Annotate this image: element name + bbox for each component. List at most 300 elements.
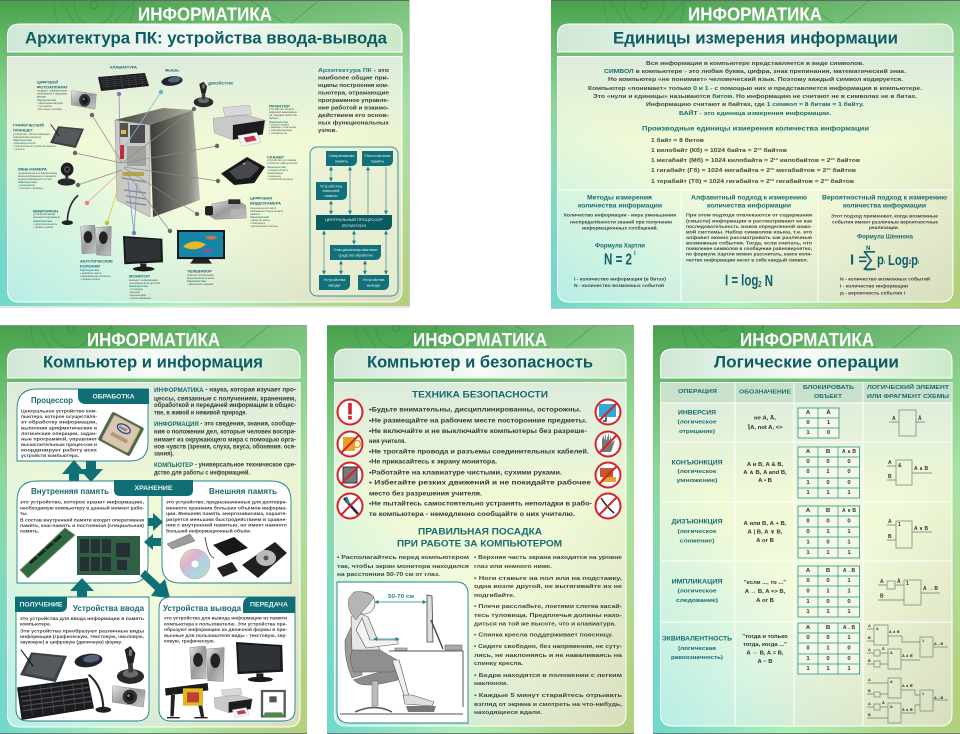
body text: В состав внутренней памяти входит оперативная [20, 516, 144, 522]
operation name: (логическое [678, 469, 716, 475]
label: camera: виде [37, 94, 46, 98]
logic gate: Ā [918, 415, 922, 422]
arrow: up to processor [62, 460, 86, 481]
label: TV: позволяет просматривать [187, 273, 214, 277]
safety rules: ния учителя. [369, 438, 406, 445]
image: joystick [117, 646, 144, 684]
arrow: input to memory [70, 578, 94, 598]
label: microphone: • чувствительность [33, 222, 57, 226]
column: alphabet approach: количества информации [707, 202, 791, 210]
label: tablet: • чувствительность рабочей поверхн. [13, 144, 56, 148]
truth table: Ā [826, 409, 831, 416]
column: measurement methods: Формула Хартли [595, 242, 645, 250]
label: tablet: • точность [13, 147, 25, 151]
notation: ⌉А, not A, <> [747, 424, 783, 431]
column: probability approach: Этот подход применяют, когда возможные [831, 214, 938, 218]
label: monitor: • частота обновления [129, 296, 151, 300]
logic scheme 2: В [868, 689, 871, 693]
posture text right: взгляд от экрана и смотреть на что-нибудь, [474, 701, 623, 708]
label: speakers: • диапазон частот [80, 271, 103, 275]
body panel [334, 382, 626, 726]
box: input devices: ввода [328, 282, 341, 288]
image: keyboard [17, 678, 94, 720]
body text: компьютера к пользователю. Эти устройства пре- [164, 620, 287, 626]
box: ROM [362, 151, 393, 166]
posture text left [337, 554, 469, 578]
units list: 1 терабайт (Тб) = 1024 гигабайта = 2 [651, 179, 743, 185]
column: alphabet approach: При этом подходе отвлекаются от содержания [686, 212, 812, 218]
definitions text: зания). [154, 450, 174, 458]
box: RAM [326, 151, 357, 166]
label: webcam: • разрешение [18, 183, 35, 187]
column: alphabet approach: алфавит можно рассматривать как различные [686, 234, 813, 240]
body text: память, кэш-память и постоянная (специальная) [20, 523, 145, 528]
posture text right: глаз или немного ниже. [474, 564, 553, 570]
heading: Логические операции [714, 352, 899, 372]
sign: no screen touch [596, 400, 620, 424]
sign: no mug [338, 432, 362, 456]
distance arrow [375, 601, 426, 603]
label: camcorder: памяти [250, 212, 260, 216]
units list: байтов [831, 167, 856, 174]
safety rules: •Не пытайтесь самостоятельно устранять неполадки в рабо- [369, 500, 592, 508]
label: microphone: • уровень шумов [33, 225, 53, 229]
notation: "тогда и только [742, 634, 788, 640]
image: mouse [74, 652, 103, 669]
table header: ЛОГИЧЕСКИЙ ЭЛЕМЕНТ [867, 383, 950, 391]
truth table: 0 [806, 578, 810, 584]
units list [651, 137, 860, 185]
label: camcorder: • чувствительность матрицы [250, 224, 278, 228]
label: printer: ПРИНТЕР [269, 104, 290, 108]
body panel [8, 382, 300, 727]
definitions text: обработкой и передачей информации в общес- [154, 401, 296, 409]
truth table: 1 [826, 666, 830, 672]
units list: 30 [826, 167, 831, 171]
truth table: 1 [847, 540, 851, 546]
intro text: БАЙТ - это единица измерения информации. [679, 109, 832, 117]
tab: processing: ОБРАБОТКА [92, 394, 135, 400]
label: scanner: • размер области [267, 168, 288, 172]
logic scheme 2: А [868, 678, 871, 682]
body text: звуковую) в цифровую (двоичную) форму. [20, 638, 122, 644]
posture text right: • Бедра находятся в положении с легким [474, 673, 622, 679]
logic scheme 1 [867, 624, 948, 669]
top title: ИНФОРМАТИКА [87, 330, 220, 350]
column: measurement methods: i [634, 251, 636, 257]
posture text right: • Каждые 5 минут старайтесь отрывать [474, 692, 622, 699]
box: output devices [159, 597, 295, 721]
units list: мегабайтов = 2 [774, 167, 826, 174]
body text: координирует работу всех [21, 446, 98, 452]
row: equivalence [662, 623, 948, 723]
definitions text: дство для работы с информацией. [154, 468, 250, 476]
definition text: наиболее общие при- [318, 75, 389, 82]
box: internal memory [17, 481, 148, 583]
truth table: 1 [806, 550, 810, 556]
posture text right: • Сидите свободно, без напряжения, не суту- [474, 643, 622, 650]
label: TV: видеоизображения на экране [187, 276, 214, 280]
notation: А or В [756, 598, 774, 604]
body text: Эти устройства преобразуют различные виды [20, 628, 144, 634]
notation: A ⇔ B, A = B, [746, 650, 784, 656]
label: printer: • способ печати [269, 122, 289, 126]
operation name: умножение) [676, 478, 718, 484]
image: external drive [205, 537, 248, 558]
arrow: down from processor [79, 461, 103, 482]
logic gate: А [888, 519, 892, 525]
body table panel [660, 382, 952, 726]
label: tablet: устройство, обеспечивающее [13, 132, 50, 136]
truth table: 0 [806, 529, 810, 535]
definitions text: тве, в живой и неживой природе. [154, 408, 247, 416]
logic gate: В [888, 534, 892, 540]
row: disjunction [672, 506, 932, 558]
logic scheme 1: Ā [882, 647, 885, 651]
intro text: Компьютер «понимает» только 0 и 1 - с помощью них и представляется информация в компьютере. [588, 85, 923, 92]
notation [747, 414, 783, 431]
sign: no power switch [338, 462, 362, 488]
header plate [8, 349, 300, 378]
body text: логические операции, задан- [21, 431, 98, 436]
label: monitor: • разрешение экрана [129, 293, 146, 297]
truth table: 0 [826, 578, 830, 584]
label: monitor: выводит информацию [129, 278, 159, 282]
monitor [427, 595, 462, 650]
label: mouse: МЫШЬ [165, 68, 179, 72]
column: probability approach: I = [850, 252, 867, 268]
label: webcam: предназначена для фиксирования [18, 171, 57, 175]
truth table: В [826, 449, 830, 455]
notation: А or В [756, 538, 774, 544]
posture text right: • Ноги ставьте на пол или на подставку, [474, 576, 623, 582]
label: speakers: КОЛОНКИ [80, 264, 100, 268]
body text: ные программой, управляет [21, 436, 98, 442]
operation name: КОНЪЮНКЦИЯ [672, 460, 723, 466]
label: printer: бумагу [269, 116, 280, 120]
heading: posture [397, 526, 562, 548]
operation name: ЭКВИВАЛЕНТНОСТЬ [662, 636, 732, 642]
posture text right: • Спинка кресла поддерживает поясницу. [474, 632, 614, 638]
body text: это устройство, которое хранит информацию, [20, 498, 144, 504]
poster: Логические операции [653, 288, 960, 734]
truth table: 1 [847, 588, 851, 594]
column: alphabet approach: чество информации несет в себе каждый символ. [686, 256, 808, 262]
column: alphabet approach: последовательность знаков определенной знако- [686, 223, 813, 229]
truth table: 1 [806, 480, 810, 486]
label: microphone [33, 208, 60, 229]
notation [744, 580, 786, 604]
box: special processing: средства обработки [338, 252, 372, 258]
column: probability approach: N - количество возможных событий [840, 276, 930, 282]
label: printer: устройство печати [269, 107, 294, 111]
row: conjunction [672, 447, 932, 498]
table header: ОБЪЕКТ [814, 394, 843, 400]
truth table: А [806, 449, 811, 455]
label: tablet: Характеристики [13, 138, 32, 142]
definitions text [154, 386, 296, 476]
label: scanner [267, 154, 298, 181]
label: tablet: ГРАФИЧЕСКИЙ [13, 122, 44, 128]
truth table: 0 [847, 518, 851, 524]
body text: ты. [20, 511, 28, 516]
body panel [8, 56, 402, 302]
operation name: (логическое [678, 420, 716, 426]
label: scanner: сканирования [267, 171, 283, 175]
truth table: 0 [847, 646, 851, 652]
logic scheme 1: А [868, 624, 871, 628]
truth table: 1 [847, 529, 851, 535]
logic gate: В [888, 474, 892, 480]
body text: память. [20, 528, 39, 534]
units list: 1 байт = 8 битов [651, 137, 704, 144]
notation: А | В, А ∨ В, [748, 530, 783, 536]
column: measurement methods: N = 2 [604, 252, 632, 268]
device: camcorder [205, 199, 246, 219]
posture text left: так, чтобы экран монитора находился [337, 563, 469, 570]
label: monitor: Характеристики [129, 284, 148, 288]
truth table: 1 [847, 490, 851, 496]
notation [742, 634, 788, 665]
label: scanner: • разрешение [267, 174, 281, 178]
truth table [798, 506, 860, 558]
device: speakers [81, 225, 111, 256]
logic gate: А [880, 579, 884, 585]
definition text: действием его основ- [318, 112, 389, 119]
logic scheme 1: А↔В [934, 642, 944, 646]
truth table: А→В [843, 568, 855, 574]
heading: safety: ТЕХНИКА БЕЗОПАСНОСТИ [412, 388, 548, 400]
logic gate [878, 578, 940, 605]
truth table [798, 623, 860, 674]
architecture diagram [310, 147, 398, 296]
image: microphone [89, 675, 111, 713]
label: camcorder: изображения и звука на карту [250, 209, 283, 213]
operation name: (логическое [678, 529, 716, 535]
box: RAM: память [335, 158, 348, 164]
label: TV: ТЕЛЕВИЗОР [187, 268, 212, 274]
truth table: 1 [847, 609, 851, 615]
logic scheme 2: В [868, 713, 871, 717]
box: input devices [15, 597, 149, 721]
logic gate: А ∨ В [914, 526, 928, 532]
definitions text: ИНФОРМАТИКА - наука, которая изучает про- [154, 386, 296, 394]
column: alphabet approach: N [762, 272, 773, 290]
safety rules [369, 406, 592, 518]
image: USB stick [167, 534, 195, 549]
tab: receive: ПОЛУЧЕНИЕ [20, 602, 63, 608]
logic gate [887, 460, 932, 485]
logic scheme 2: А ∧ В̄ [902, 684, 914, 688]
logic gate: В [880, 594, 884, 600]
truth table: А [806, 625, 811, 631]
safety rules: место без разрешения учителя. [369, 490, 482, 498]
logic scheme 2: А [868, 702, 871, 706]
sign: attention [338, 400, 362, 424]
label: microphone: устройство ввода [33, 212, 55, 216]
operation name: равнозначность) [671, 655, 723, 661]
body text: нии с внутренней памятью, но имеет намного [166, 522, 287, 528]
box: input devices: Устройства [324, 277, 346, 282]
device: joystick [194, 82, 213, 107]
column: alphabet approach: вой системы. Набор символов языка, т.е. его [686, 228, 812, 234]
sign: no tools [338, 494, 362, 518]
box: ROM: Постоянная [364, 153, 390, 158]
truth table [798, 447, 860, 498]
label: camcorder: ЦИФРОВАЯ [250, 196, 272, 200]
body text: большей информационный объём. [166, 528, 251, 534]
column: probability approach: Формула Шеннона [857, 234, 913, 240]
image: memory board [77, 536, 140, 575]
body text: необходимую компьютеру в данный момент рабо- [20, 504, 145, 510]
operation name [662, 636, 732, 661]
label: printer: • разрешение [269, 128, 292, 132]
safety rules: •Не трогайте провода и разъемы соединительных кабелей. [369, 448, 589, 456]
label: printer [269, 104, 297, 135]
top title: ИНФОРМАТИКА [138, 4, 272, 24]
label: tablet: ПЛАНШЕТ [13, 128, 34, 132]
truth table: 0 [806, 469, 810, 475]
operation name [672, 518, 723, 544]
truth table: 0 [847, 469, 851, 475]
logic scheme 2: А↔В [934, 696, 944, 700]
truth table: 1 [826, 609, 830, 615]
definition text: ние работой и взаимо- [318, 104, 389, 111]
logic scheme 1: В [868, 659, 871, 663]
posture illustration [337, 582, 468, 723]
body text: это устройства для ввода информации в память [20, 615, 144, 621]
truth table: 1 [847, 550, 851, 556]
intro text: Информацию считают в байтах, где 1 символ = 8 битам = 1 байту . [646, 101, 865, 108]
truth table: 0 [806, 588, 810, 594]
definition text: пьютера, отражающие [318, 91, 390, 97]
device: webcam [58, 163, 75, 186]
image: plotter [165, 683, 208, 718]
label: printer: • размер отпечатка [269, 125, 296, 129]
units list: килобайтов = 2 [778, 157, 831, 164]
top title: ИНФОРМАТИКА [740, 330, 874, 350]
truth table: 0 [826, 599, 830, 605]
body text: устройств компьютера. [21, 452, 79, 458]
truth table: 0 [826, 656, 830, 662]
tab: transmit: ПЕРЕДАЧА [250, 602, 288, 608]
logic gate: Ā [897, 578, 901, 585]
logic gate: А → В [923, 586, 938, 592]
column: measurement methods: Количество информации - мера уменьшения [564, 212, 676, 218]
poster 2 background [551, 0, 960, 308]
device: scanner [221, 157, 265, 185]
definitions text: нимает из окружающего мира с помощью орга- [154, 436, 296, 444]
heading: Процессор [31, 395, 73, 405]
truth table: 0 [806, 518, 810, 524]
heading: Архитектура ПК: устройства ввода-вывода [25, 28, 388, 48]
box: output devices [358, 275, 389, 290]
body text: ризуется меньшим быстродействием в сравне- [166, 516, 288, 522]
truth table: А [806, 410, 811, 416]
arrow: external to internal [144, 534, 161, 550]
notation: тогда, когда ..." [743, 642, 787, 648]
label: scanner: Характеристики [267, 165, 286, 169]
column: alphabet approach: (смысла) информации и рассматривают ее как [686, 218, 813, 224]
poster 1 background [0, 0, 410, 307]
header plate [8, 24, 402, 52]
logic scheme 2: & [890, 705, 893, 709]
logic scheme 1: & [876, 627, 879, 631]
header plate [558, 24, 953, 52]
label: TV: • диагональ экрана [187, 282, 213, 286]
truth table: 0 [847, 480, 851, 486]
device: microphone [62, 195, 78, 225]
label: camcorder [250, 196, 283, 228]
logic gate: А [888, 460, 892, 466]
units list: 10 [774, 157, 778, 161]
label: printer: • скорость [269, 131, 288, 135]
truth table: 1 [827, 420, 831, 426]
label: tablet: • разрешающая способн. [13, 141, 36, 145]
box: CPU: (процессоры) [342, 222, 367, 228]
safety rules: те компьютера - немедленно сообщайте о них учителю. [369, 510, 575, 518]
truth table: 0 [826, 459, 830, 465]
posture text right: одна возле другой, не вытягивайте их не [474, 583, 622, 590]
truth table: 0 [847, 459, 851, 465]
truth table: 1 [806, 599, 810, 605]
notation: A → B, A => B, [745, 589, 786, 595]
box: special processing [330, 245, 381, 260]
intro text: СИМВОЛ в компьютере - это любая буква, цифра, знак препинания, математический знак. [604, 68, 907, 75]
units list: 1 мегабайт (Мб) = 1024 килобайта = 2 [651, 158, 746, 164]
heading: derived units: Производные единицы измерения количества информации [642, 126, 869, 132]
truth table: В [826, 625, 830, 631]
label: camera: • тип памяти [37, 104, 52, 108]
tab: storage: ХРАНЕНИЕ [134, 485, 173, 492]
label: webcam: видеоизображения и передачи [18, 174, 56, 178]
label: camera: создаёт графические [37, 88, 67, 92]
column: alphabet approach: 2 [758, 280, 762, 288]
device: mouse [161, 75, 183, 87]
poster: Компьютер и информация [0, 288, 307, 734]
notation: A ~ B [757, 659, 773, 665]
operation name: (логическое [678, 588, 716, 594]
logic scheme 2: Ā [882, 701, 885, 705]
label: scanner: • CCD/CIS сенсор [267, 177, 293, 181]
label: camcorder: • объём памяти [250, 221, 265, 225]
posture text left: на расстоянии 50-70 см от глаз. [337, 572, 441, 578]
notation: А и В, А & В, [747, 462, 784, 468]
row: inversion [678, 408, 925, 438]
logic scheme 1: Ā ∧ В̄ [902, 654, 914, 658]
body text: это устройства для вывода информации из памяти [164, 614, 287, 620]
notation: "если ..., то ..." [744, 580, 786, 586]
truth table: 0 [806, 635, 810, 641]
keyboard [395, 648, 407, 650]
units list: байтов [762, 147, 787, 154]
sign: no hand [596, 432, 620, 456]
label: monitor [129, 274, 160, 300]
units list: 40 [824, 178, 829, 182]
column: probability approach: I - количество информации [840, 282, 908, 288]
image: RAM stick [20, 528, 75, 578]
label: monitor: пользователю на дисплей [129, 281, 160, 285]
body text: это устройство, предназначенные для долговре- [166, 498, 287, 504]
truth table: 0 [826, 518, 830, 524]
heading: posture: ПРАВИЛЬНАЯ ПОСАДКА [418, 526, 542, 536]
arrow: memory to output [140, 570, 170, 598]
units list: 10 [757, 147, 762, 151]
definitions text: ИНФОРМАЦИЯ - это сведения, знания, сообще- [154, 420, 296, 428]
definition text: ных функциональных [318, 120, 390, 127]
operation name: отрицание) [679, 429, 715, 435]
operation name: (логическая [678, 646, 716, 652]
